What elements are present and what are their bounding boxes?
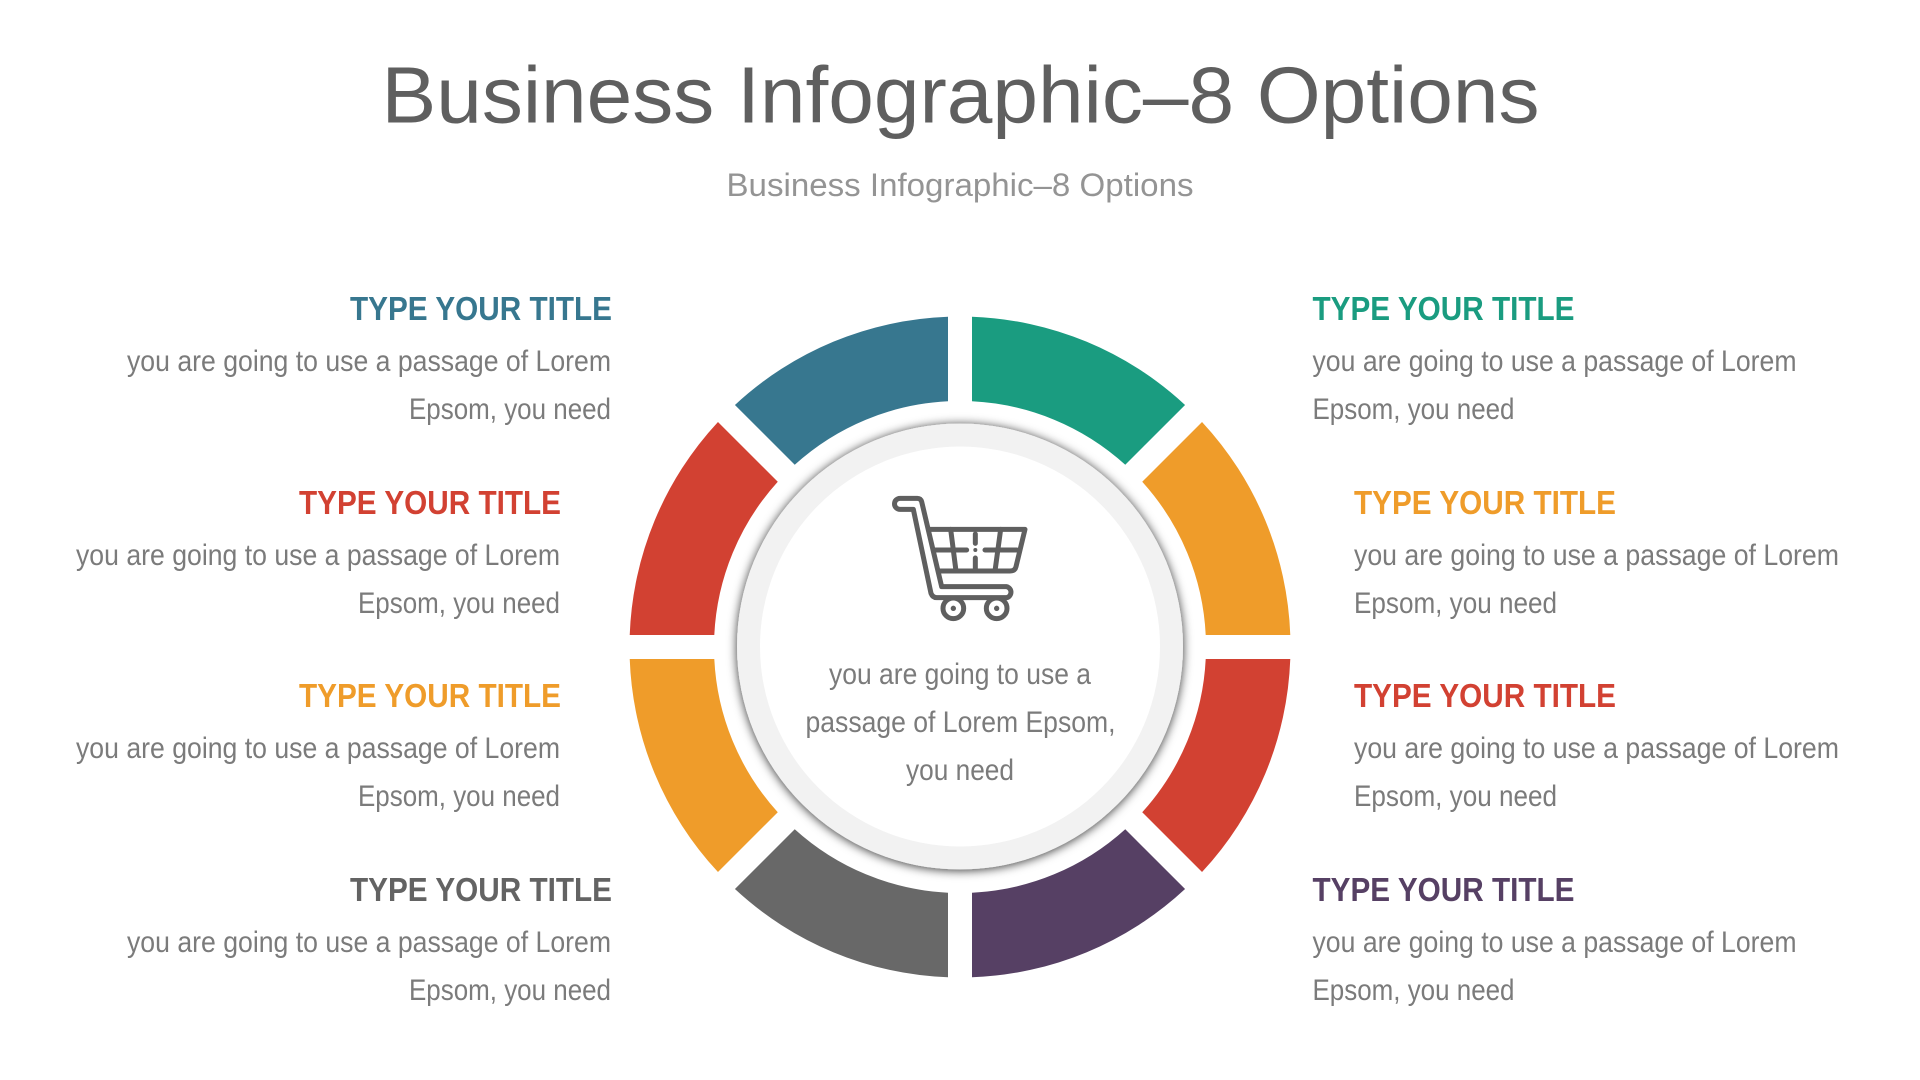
ring chart: eight segments xyxy=(630,317,1290,977)
text block: left 3 orange: you are going to use a passage of Lorem xyxy=(76,732,560,765)
text block: right 3 red: TYPE YOUR TITLE xyxy=(1354,677,1616,714)
text block: right 1 teal: Epsom, you need xyxy=(1312,393,1514,426)
center text: passage of Lorem Epsom, xyxy=(806,706,1116,739)
text block: right 4 purple xyxy=(1312,871,1796,1007)
text block: right 4 purple: you are going to use a passage of Lorem xyxy=(1312,926,1796,959)
center text: you need xyxy=(906,754,1014,787)
segment: orange lower left xyxy=(630,659,778,872)
text block: right 1 teal: TYPE YOUR TITLE xyxy=(1312,290,1574,327)
center text: you are going to use a xyxy=(829,658,1092,691)
text block: right 4 purple: TYPE YOUR TITLE xyxy=(1312,871,1574,908)
text block: left 2 red: Epsom, you need xyxy=(358,587,560,620)
text block: right 2 orange: Epsom, you need xyxy=(1354,587,1557,620)
segment: red lower right xyxy=(1142,659,1290,872)
text block: right 1 teal xyxy=(1312,290,1796,426)
center disc with shadowed ring xyxy=(737,424,1183,870)
subtitle: Business Infographic–8 Options xyxy=(726,167,1194,203)
text block: right 2 orange xyxy=(1354,484,1839,620)
text block: right 2 orange: you are going to use a passage of Lorem xyxy=(1354,539,1839,572)
text block: left 1 blue xyxy=(127,290,612,426)
text block: left 1 blue: Epsom, you need xyxy=(409,393,611,426)
text block: left 2 red: you are going to use a passage of Lorem xyxy=(76,539,560,572)
text block: left 4 gray: you are going to use a passage of Lorem xyxy=(127,926,611,959)
segment: gray bottom left xyxy=(735,829,948,977)
title: Business Infographic–8 Options xyxy=(382,50,1540,140)
segment: red upper left xyxy=(630,422,778,635)
text block: right 3 red: you are going to use a passage of Lorem xyxy=(1354,732,1839,765)
center text xyxy=(806,658,1116,787)
text block: right 1 teal: you are going to use a passage of Lorem xyxy=(1312,345,1796,378)
text block: left 1 blue: TYPE YOUR TITLE xyxy=(350,290,612,327)
text block: left 3 orange xyxy=(76,677,561,813)
text block: left 4 gray: TYPE YOUR TITLE xyxy=(350,871,612,908)
segment: blue top left xyxy=(735,317,948,465)
text block: left 2 red xyxy=(76,484,561,620)
text block: left 4 gray: Epsom, you need xyxy=(409,974,611,1007)
icon: shopping cart xyxy=(894,498,1025,619)
text block: left 2 red: TYPE YOUR TITLE xyxy=(299,484,561,521)
text block: left 3 orange: TYPE YOUR TITLE xyxy=(299,677,561,714)
segment: purple bottom right xyxy=(972,829,1185,977)
segment: orange upper right xyxy=(1142,422,1290,635)
text block: right 4 purple: Epsom, you need xyxy=(1312,974,1514,1007)
text block: left 4 gray xyxy=(127,871,612,1007)
text block: right 3 red xyxy=(1354,677,1839,813)
text block: left 3 orange: Epsom, you need xyxy=(358,780,560,813)
text block: right 2 orange: TYPE YOUR TITLE xyxy=(1354,484,1616,521)
segment: teal top right xyxy=(972,317,1185,465)
text block: right 3 red: Epsom, you need xyxy=(1354,780,1557,813)
text block: left 1 blue: you are going to use a passage of Lorem xyxy=(127,345,611,378)
